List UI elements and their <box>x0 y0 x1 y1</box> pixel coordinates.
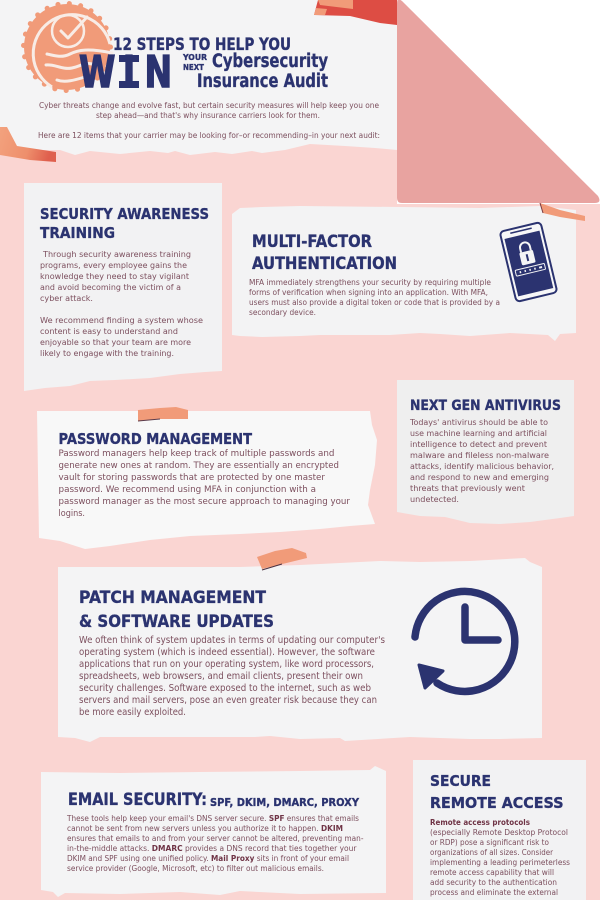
heading: TRAINING <box>40 224 115 242</box>
body text: vault for storing passwords that are protected by one master <box>58 473 325 483</box>
body text <box>79 635 385 718</box>
heading <box>430 772 564 812</box>
body text: forms of verification when signing into an application. With MFA, <box>249 288 488 297</box>
body text: operating system (which is indeed essential). However, the software <box>79 647 375 658</box>
heading: PATCH MANAGEMENT <box>79 588 266 608</box>
icon: orange badge with check mark <box>24 4 112 90</box>
tape: top red <box>314 0 397 25</box>
body text: generate new ones at random. They are essentially an encrypted <box>58 461 339 471</box>
body text: attacks, identify malicious behavior, <box>410 462 554 471</box>
heading: NEXT GEN ANTIVIRUS <box>410 398 561 414</box>
body text: We recommend finding a system whose <box>40 316 203 325</box>
body text: and respond to new and emerging <box>410 473 549 482</box>
panel: security awareness training <box>24 183 222 391</box>
panel: multi-factor authentication <box>232 206 576 341</box>
body text <box>40 250 203 358</box>
intro text: Here are 12 items that your carrier may be looking for–or recommending–in your next audit: <box>38 131 380 140</box>
body text: enjoyable so that your team are more <box>40 338 191 347</box>
tape: patch panel <box>257 548 307 570</box>
body text: We often think of system updates in terms of updating our computer's <box>79 635 385 646</box>
heading: SPF, DKIM, DMARC, PROXY <box>210 796 360 809</box>
heading: & SOFTWARE UPDATES <box>79 612 274 632</box>
panel: secure remote access <box>413 760 586 900</box>
heading <box>68 790 360 809</box>
body text: or RDP) pose a significant risk to <box>430 838 549 847</box>
body text: implementing a leading perimeterless <box>430 858 570 867</box>
body text: password. We recommend using MFA in conjunction with a <box>58 485 316 495</box>
body text: users must also provide a digital token or code that is provided by a <box>249 298 500 307</box>
heading: SECURE <box>430 772 491 790</box>
body text: (especially Remote Desktop Protocol <box>430 828 568 837</box>
heading: SECURITY AWARENESS <box>40 205 209 223</box>
intro text: Cyber threats change and evolve fast, but certain security measures will help keep you one <box>39 101 379 110</box>
panel: email security <box>41 766 386 897</box>
heading: MULTI-FACTOR <box>252 232 372 251</box>
tape: multi-factor panel <box>540 203 585 221</box>
heading <box>40 205 209 242</box>
icon: clock with return arrow <box>415 591 515 691</box>
body text: DKIM and SPF using one unified policy. Mail Proxy sits in front of your email <box>67 854 349 863</box>
body text: content is easy to understand and <box>40 327 178 336</box>
body text: and avoid becoming the victim of a <box>40 283 181 292</box>
body text: applications that run on your operating system, like word processors, <box>79 659 374 670</box>
body text <box>409 418 554 504</box>
body text <box>58 449 350 519</box>
body text: spreadsheets, web browsers, and email clients, present their own <box>79 671 363 682</box>
body text: logins. <box>58 509 85 519</box>
decorative folded triangle <box>397 0 599 203</box>
body text: malware and fileless non-malware <box>410 451 549 460</box>
body text: threats that previously went <box>410 484 525 493</box>
body text: programs, every employee gains the <box>40 261 187 270</box>
body text: intelligence to detect and prevent <box>410 440 547 449</box>
title: Insurance Audit <box>197 71 328 92</box>
heading: REMOTE ACCESS <box>430 794 564 812</box>
panel: header <box>0 0 397 155</box>
body text: use machine learning and artificial <box>410 429 547 438</box>
body text: Through security awareness training <box>42 250 191 259</box>
title: YOUR <box>182 53 207 62</box>
panel: patch management <box>58 558 542 742</box>
title: 12 STEPS TO HELP YOU <box>113 35 291 54</box>
body text: service provider (Google, Microsoft, etc) to filter out malicious emails. <box>67 864 324 873</box>
body text: MFA immediately strengthens your security by requiring multiple <box>249 278 491 287</box>
body text: servers and mail servers, pose an even greater risk because they can <box>79 695 377 706</box>
title: WIN <box>79 47 172 98</box>
heading <box>79 588 274 632</box>
body text: Remote access protocols <box>430 818 530 827</box>
body text: add security to the authentication <box>430 878 557 887</box>
body text: likely to engage with the training. <box>40 349 174 358</box>
body text: Todays' antivirus should be able to <box>409 418 548 427</box>
heading: EMAIL SECURITY: <box>68 790 207 809</box>
body text: password manager as the most secure approach to managing your <box>58 497 350 507</box>
panel: next gen antivirus <box>397 380 574 524</box>
body text: ensures that emails to and from your server cannot be altered, preventing man- <box>67 834 364 843</box>
heading <box>252 232 397 273</box>
intro text <box>38 101 380 140</box>
body text: cyber attack. <box>40 294 93 303</box>
title <box>79 35 328 98</box>
body text: Password managers help keep track of multiple passwords and <box>58 449 334 459</box>
body text <box>430 818 570 897</box>
body text: be more easily exploited. <box>79 707 186 718</box>
tape: password panel <box>138 407 188 421</box>
intro text: step ahead—and that's why insurance carriers look for them. <box>96 111 320 120</box>
body text <box>249 278 500 317</box>
panel: password management <box>37 411 377 549</box>
body text: undetected. <box>410 495 459 504</box>
body text: secondary device. <box>249 308 316 317</box>
heading: PASSWORD MANAGEMENT <box>58 430 253 448</box>
icon: locked phone <box>500 222 557 302</box>
body text: security challenges. Software exposed to the internet, such as web <box>79 683 371 694</box>
body text: in-the-middle attacks. DMARC provides a DNS record that ties together your <box>67 844 357 853</box>
body text: process and eliminate the external <box>430 888 558 897</box>
body text: knowledge they need to stay vigilant <box>40 272 189 281</box>
heading: AUTHENTICATION <box>252 254 397 273</box>
body text <box>66 814 364 873</box>
body text: cannot be sent from new servers unless you authorize it to happen. DKIM <box>67 824 343 833</box>
body text: These tools help keep your email's DNS server secure. SPF ensures that emails <box>66 814 359 823</box>
title: Cybersecurity <box>212 51 328 72</box>
body text: organizations of all sizes. Consider <box>430 848 554 857</box>
body text: remote access capability that will <box>430 868 554 877</box>
tape: left orange <box>0 127 56 162</box>
title: NEXT <box>183 63 204 72</box>
